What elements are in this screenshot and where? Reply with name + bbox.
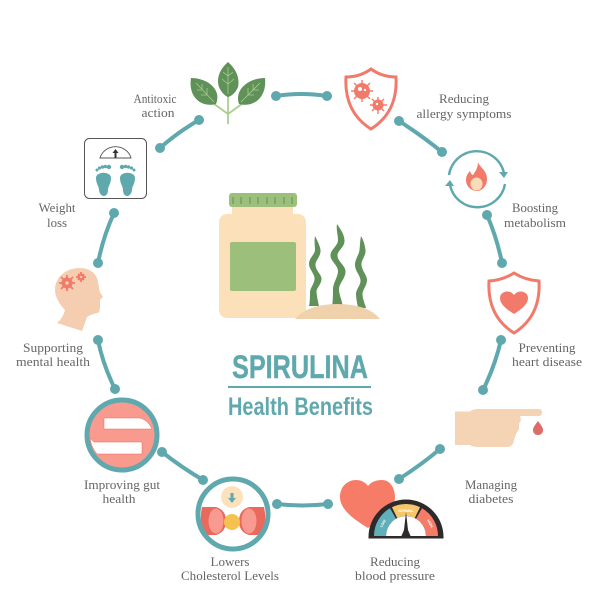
text: boosting metabolism: Boosting: [512, 200, 558, 215]
icon: metabolism cycle with flame: [445, 151, 508, 207]
icon: cholesterol artery: [198, 479, 268, 549]
connector: cholesterol to gut: [157, 447, 208, 485]
text: reducing blood pressure: blood pressure: [355, 568, 435, 583]
connector: blood pressure to cholesterol: [272, 499, 333, 509]
icon: green leaves: [191, 62, 265, 124]
text: managing diabetes: [465, 477, 517, 506]
text: boosting metabolism: [504, 200, 566, 230]
icon: heart with blood pressure gauge: HIGH: [426, 519, 434, 529]
text: reducing allergy symptoms: Reducing: [439, 91, 489, 106]
text: reducing blood pressure: [355, 554, 435, 583]
title: spirulina: SPIRULINA: [232, 349, 368, 385]
text: supporting mental health: Supporting: [23, 340, 84, 355]
text: lowers cholesterol levels: [181, 554, 279, 583]
text: reducing allergy symptoms: allergy symptoms: [416, 106, 512, 121]
text: weight loss: Weight: [38, 200, 76, 215]
text: managing diabetes: Managing: [465, 477, 517, 492]
connector: heart shield to diabetes: [478, 335, 506, 395]
icon: weight scale: [84, 138, 146, 198]
text: supporting mental health: [16, 340, 91, 369]
text: reducing blood pressure: Reducing: [370, 554, 420, 569]
icon: allergy shield: [346, 69, 396, 129]
text: preventing heart disease: heart disease: [512, 354, 582, 369]
text: antitoxic action: [134, 91, 177, 120]
text: preventing heart disease: [512, 340, 582, 369]
connector: metabolism to heart shield: [482, 210, 507, 268]
text: boosting metabolism: metabolism: [504, 215, 566, 230]
text: supporting mental health: mental health: [16, 354, 91, 369]
text: antitoxic action: Antitoxic: [134, 91, 177, 106]
text: improving gut health: Improving gut: [84, 477, 160, 492]
text: improving gut health: health: [102, 491, 136, 506]
text: lowers cholesterol levels: Lowers: [210, 554, 250, 569]
icon: gut circle: [87, 400, 157, 470]
icon: head with gears: [55, 268, 103, 331]
text: reducing allergy symptoms: [416, 91, 512, 121]
illustration: spirulina jar with seaweed: [219, 193, 380, 319]
connector: head to scale: [93, 208, 119, 268]
icon: heart with blood pressure gauge: LOW: [379, 518, 387, 528]
connector: gut to head: [93, 335, 120, 394]
icon: heart with blood pressure gauge: [340, 480, 444, 538]
text: weight loss: [38, 200, 76, 230]
connector: shield to metabolism: [394, 116, 447, 157]
subtitle: health benefits: Health Benefits: [228, 393, 373, 421]
text: managing diabetes: diabetes: [468, 491, 514, 506]
text: improving gut health: [84, 477, 160, 506]
text: lowers cholesterol levels: Cholesterol Levels: [181, 568, 279, 583]
text: weight loss: loss: [47, 215, 67, 230]
connector: leaf to shield: [271, 91, 332, 101]
icon: heart with blood pressure gauge: NORMAL: [398, 509, 415, 513]
icon: heart shield: [489, 273, 539, 333]
icon: pointing hand with blood drop: [455, 409, 543, 447]
connector: scale to leaf: [155, 115, 204, 153]
text: antitoxic action: action: [142, 105, 175, 120]
text: preventing heart disease: Preventing: [518, 340, 576, 355]
connector: diabetes to blood pressure: [394, 444, 445, 484]
